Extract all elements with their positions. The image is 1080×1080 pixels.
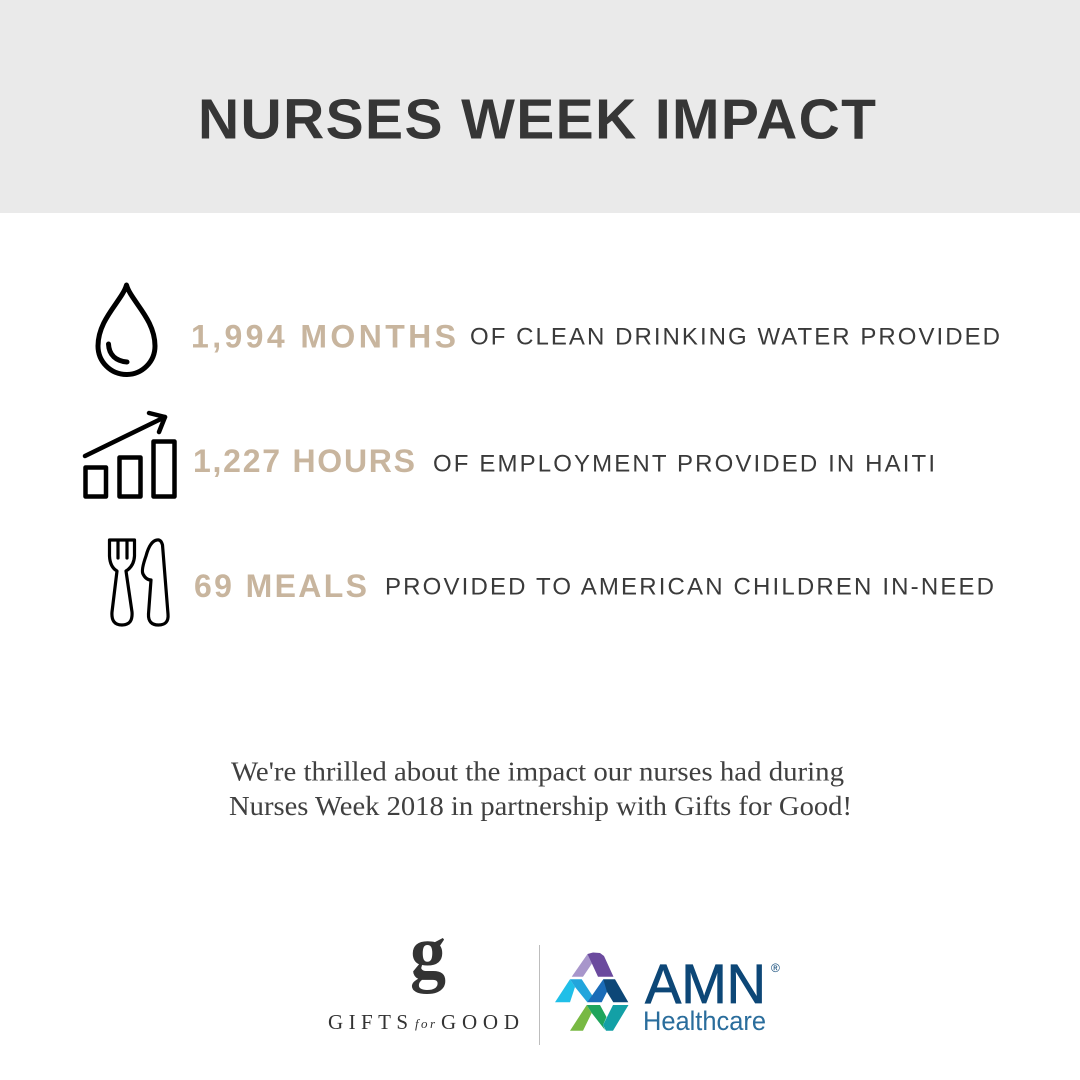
title: NURSES WEEK IMPACT: [198, 88, 876, 152]
logo divider: [539, 945, 540, 1045]
logo: AMN Healthcare: AMN: [645, 952, 766, 1015]
closing message: Nurses Week 2018 in partnership with Gifts for Good!: [229, 791, 852, 821]
icon: fork and knife: [110, 540, 168, 625]
logo: AMN Healthcare: Healthcare: [643, 1006, 766, 1036]
logo: Gifts for Good: GIFTS: [328, 1010, 408, 1034]
icon: bar chart with rising arrow: [85, 413, 174, 496]
logo: Gifts for Good: GOOD: [441, 1010, 519, 1034]
stat: meals: PROVIDED TO AMERICAN CHILDREN IN-NEED: [385, 574, 994, 600]
stat: meals: 69 MEALS: [194, 568, 367, 604]
icon: water drop: [98, 285, 155, 374]
logo: AMN Healthcare: [555, 952, 780, 1036]
stat: clean water: OF CLEAN DRINKING WATER PROVIDED: [470, 324, 1000, 350]
stat: meals: [194, 568, 994, 604]
stat: employment: OF EMPLOYMENT PROVIDED IN HAITI: [433, 450, 935, 478]
logo: Gifts for Good: for: [415, 1016, 436, 1031]
logo: Gifts for Good: [328, 910, 519, 1034]
stat: clean water: [191, 318, 1000, 354]
closing message: [229, 756, 852, 821]
closing message: We're thrilled about the impact our nurses had during: [231, 756, 844, 786]
stat: employment: 1,227 HOURS: [193, 443, 415, 479]
stat: employment: [193, 443, 935, 479]
logo: Gifts for Good: g: [410, 910, 446, 994]
logo: AMN Healthcare: ®: [771, 961, 780, 975]
stat: clean water: 1,994 MONTHS: [191, 318, 456, 354]
header band: [0, 0, 1080, 213]
